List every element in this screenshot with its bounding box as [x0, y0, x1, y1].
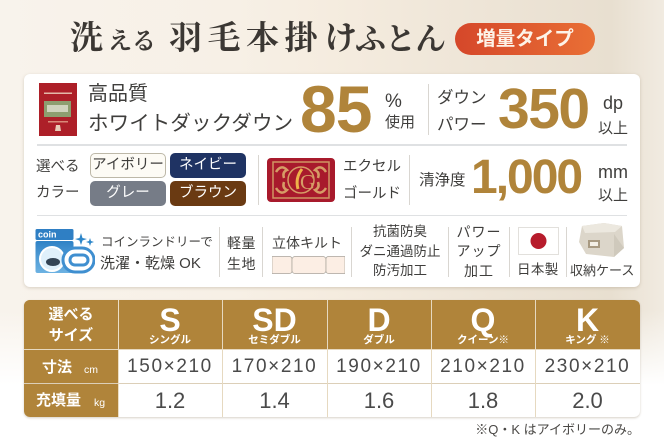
row: dimensions: 170×210 [232, 356, 317, 377]
unit: mm or more: 以上 [598, 187, 628, 204]
row label: dimensions cm: 寸法 [42, 359, 72, 376]
text: antibacterial, mite, stain-proof: 抗菌防臭 [373, 224, 427, 239]
size SD: セミダブル [248, 334, 301, 346]
row label: fill weight kg [36, 392, 105, 409]
text: power-up processing: 加工 [464, 263, 494, 279]
unit: dp or more [598, 93, 628, 137]
icon: storage case [570, 223, 634, 278]
row: fill weight [155, 388, 603, 413]
color swatches: グレー [106, 185, 150, 201]
unit: dp or more: 以上 [598, 120, 628, 137]
text: coin laundry wash and dry OK: 洗濯・乾燥 OK [100, 255, 201, 272]
row label: fill weight kg: 充填量 [36, 392, 81, 409]
title: 羽毛本掛 [169, 21, 323, 57]
title: える [108, 29, 156, 55]
row: fill weight: 1.4 [259, 388, 290, 413]
size SD [248, 302, 301, 346]
icon: coin laundry [36, 229, 95, 274]
table: size chart [24, 300, 640, 417]
row label: dimensions cm: cm [84, 364, 98, 376]
row: fill weight: 1.6 [364, 388, 394, 413]
header: selectable sizes [48, 306, 94, 344]
text: power-up processing [456, 224, 502, 279]
size Q: Q [471, 302, 495, 338]
unit: percent used: % [385, 91, 402, 112]
size K: キング ※ [565, 334, 610, 346]
icon: Japanese flag, made in Japan [517, 227, 559, 277]
icon: Japanese flag, made in Japan: 日本製 [517, 262, 559, 277]
text: coin laundry wash and dry OK: コインランドリーで [101, 235, 213, 249]
text: antibacterial, mite, stain-proof [360, 224, 440, 278]
quilt diagram: 3D quilt [272, 235, 345, 274]
stat: 350: 350 [498, 77, 589, 141]
stat: 1,000: 1,000 [471, 151, 581, 204]
header: selectable sizes: 選べる [48, 306, 94, 323]
header: selectable sizes: サイズ [49, 327, 93, 344]
text: excel gold [343, 158, 401, 202]
text: excel gold: エクセル [343, 159, 401, 175]
size D: D [367, 302, 391, 338]
text: power-up processing: パワー [456, 224, 502, 240]
row: dimensions [127, 356, 630, 377]
unit: mm or more [598, 162, 628, 204]
text: lightweight fabric [227, 235, 256, 272]
text: down power [437, 88, 486, 134]
size S: S [159, 302, 181, 338]
row: fill weight: 2.0 [572, 388, 603, 413]
text: coin laundry wash and dry OK [100, 235, 213, 272]
text: antibacterial, mite, stain-proof: ダニ通過防止 [360, 244, 440, 259]
size S: シングル [149, 334, 191, 346]
row label: dimensions cm [42, 359, 98, 376]
unit: mm or more: mm [598, 162, 628, 182]
icon: storage case: 収納ケース [570, 263, 634, 278]
color swatches [90, 153, 246, 206]
unit: dp or more: dp [603, 93, 623, 113]
color swatches: ネイビー [179, 157, 237, 173]
stat: 85 percent: 85 [300, 72, 371, 146]
text: down power: ダウン [437, 89, 486, 107]
color swatches: ブラウン [179, 185, 237, 201]
label: selectable colors: 選べる [36, 159, 80, 175]
row label: fill weight kg: kg [94, 397, 105, 409]
row: dimensions: 150×210 [127, 356, 213, 377]
icon: excel gold label: G [300, 170, 315, 194]
size Q [457, 302, 509, 346]
text: lightweight fabric: 生地 [227, 256, 256, 272]
title: ふとん [355, 22, 445, 57]
size D: ダブル [363, 334, 395, 346]
size D [363, 302, 395, 346]
size Q: クイーン※ [457, 334, 509, 346]
text: antibacterial, mite, stain-proof: 防汚加工 [373, 263, 427, 278]
row: fill weight: 1.8 [468, 388, 498, 413]
unit: percent used [385, 91, 415, 131]
label: selectable colors: カラー [36, 185, 80, 201]
text: cleanliness: 清浄度 [419, 172, 466, 189]
quilt diagram: 3D quilt: 立体キルト [272, 235, 342, 251]
text: high quality white duck down [88, 83, 293, 135]
footnote: ※Q・K はアイボリーのみ。 [475, 422, 640, 437]
text: power-up processing: アップ [456, 243, 502, 259]
text: high quality white duck down: ホワイトダックダウン [88, 112, 293, 135]
text: down power: パワー [437, 116, 486, 134]
size SD: SD [252, 302, 297, 338]
label: selectable colors [36, 158, 80, 201]
title: け [324, 21, 357, 57]
row headers [24, 300, 118, 417]
panel: specifications [24, 74, 640, 287]
unit: percent used: 使用 [385, 114, 415, 131]
row: dimensions: 190×210 [336, 356, 422, 377]
text: lightweight fabric: 軽量 [227, 235, 256, 251]
text: high quality white duck down: 高品質 [88, 83, 148, 105]
size K [565, 302, 610, 346]
row: fill weight: 1.2 [155, 388, 185, 413]
row: dimensions: 210×210 [440, 356, 526, 377]
badge: extra-fill type [455, 23, 595, 55]
text: excel gold: ゴールド [343, 186, 401, 202]
color swatches: アイボリー [92, 157, 164, 173]
row: dimensions: 230×210 [545, 356, 630, 377]
icon: white duck down label [39, 83, 77, 136]
title [70, 20, 445, 57]
size K: K [576, 302, 599, 338]
title: 洗 [70, 21, 103, 57]
badge: extra-fill type: 増量タイプ [476, 28, 574, 50]
icon: coin laundry: coin [38, 230, 57, 240]
table header row [24, 300, 640, 349]
size S [149, 302, 191, 346]
icon: excel gold label [267, 158, 335, 202]
